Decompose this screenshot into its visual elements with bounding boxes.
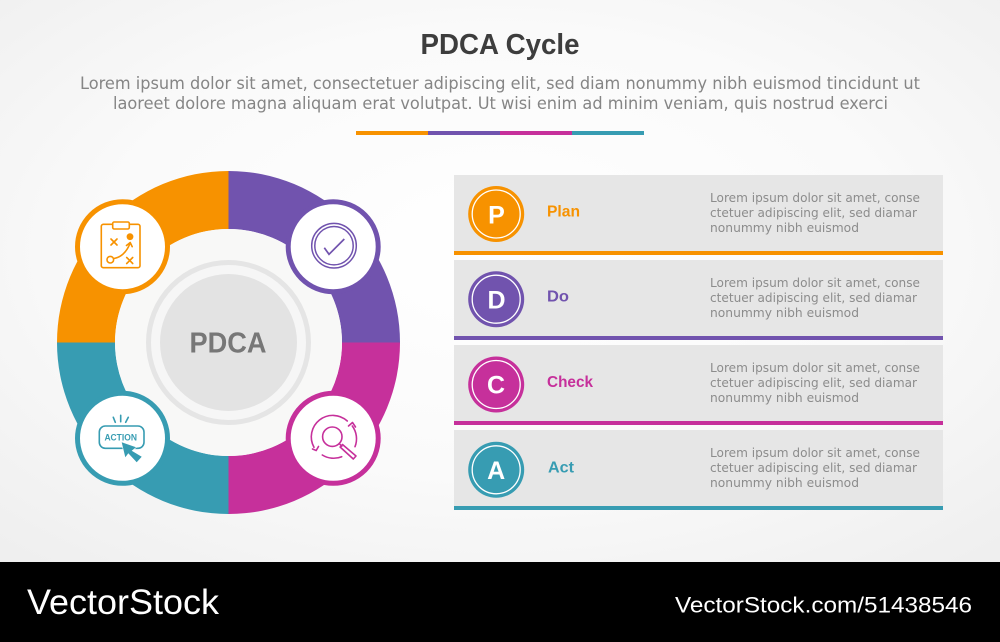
description: Check: nonummy nibh euismod (710, 390, 859, 405)
icon: clipboard strategy in orange circle (78, 202, 168, 292)
centre hub (115, 229, 342, 456)
badge: P: P (488, 201, 505, 229)
description: Plan: ctetuer adipiscing elit, sed diamar (710, 205, 918, 220)
description: Check (710, 360, 920, 405)
list row: Check (454, 345, 943, 425)
badge: C (468, 356, 524, 412)
description: Plan (710, 190, 920, 235)
ring segment: do (228, 171, 400, 342)
badge: D (468, 271, 524, 327)
list row: Do (454, 260, 943, 340)
description: Plan: Lorem ipsum dolor sit amet, conse (710, 190, 920, 205)
badge: A: A (487, 457, 505, 485)
list row: Act (454, 430, 943, 510)
description: Act: nonummy nibh euismod (710, 475, 859, 490)
description: Do (710, 275, 920, 320)
subtitle text block: Lorem ipsum dolor sit amet, consectetuer adipiscing elit, sed diam nonummy nibh euismod tincidunt ut (80, 74, 921, 93)
circular PDCA diagram (57, 171, 400, 514)
description: Act (710, 445, 920, 490)
badge: A (468, 442, 524, 498)
label: Act: Act (548, 460, 575, 476)
ring segment: check (228, 342, 400, 514)
description: Act: ctetuer adipiscing elit, sed diamar (710, 460, 918, 475)
footer image id: VectorStock.com/51438546 (675, 592, 972, 618)
title: PDCA Cycle (420, 29, 580, 61)
badge: C: C (487, 372, 505, 400)
description: Act: Lorem ipsum dolor sit amet, conse (710, 445, 920, 460)
footer logo text: VectorStock (27, 583, 220, 622)
description: Do: ctetuer adipiscing elit, sed diamar (710, 290, 918, 305)
icon: check mark in purple circle (288, 202, 378, 292)
ring segment: plan (57, 171, 228, 342)
subtitle text block: laoreet dolore magna aliquam erat volutpat. Ut wisi enim ad minim veniam, quis nostrud exerci (113, 94, 888, 113)
description: Do: nonummy nibh euismod (710, 305, 859, 320)
four-colour title divider (356, 131, 644, 135)
description: Check: Lorem ipsum dolor sit amet, conse (710, 360, 920, 375)
centre hub: PDCA (190, 328, 267, 360)
label: Plan: Plan (547, 204, 580, 220)
badge: D: D (487, 286, 506, 314)
icon: magnifier with cycle arrows in magenta circle (288, 393, 378, 483)
list row: Plan (454, 175, 943, 255)
icon: action button with cursor in teal circle (78, 393, 168, 483)
footer bar with attribution (0, 562, 1000, 642)
description: Plan: nonummy nibh euismod (710, 220, 859, 235)
description: Check: ctetuer adipiscing elit, sed diamar (710, 375, 918, 390)
badge: P (468, 186, 524, 242)
description: Do: Lorem ipsum dolor sit amet, conse (710, 275, 920, 290)
ring segment: act (57, 342, 228, 514)
label: Check: Check (547, 374, 593, 391)
label: Do: Do (547, 288, 569, 306)
icon: action button with cursor in teal circle: ACTION (104, 432, 137, 442)
subtitle text block (80, 74, 921, 113)
